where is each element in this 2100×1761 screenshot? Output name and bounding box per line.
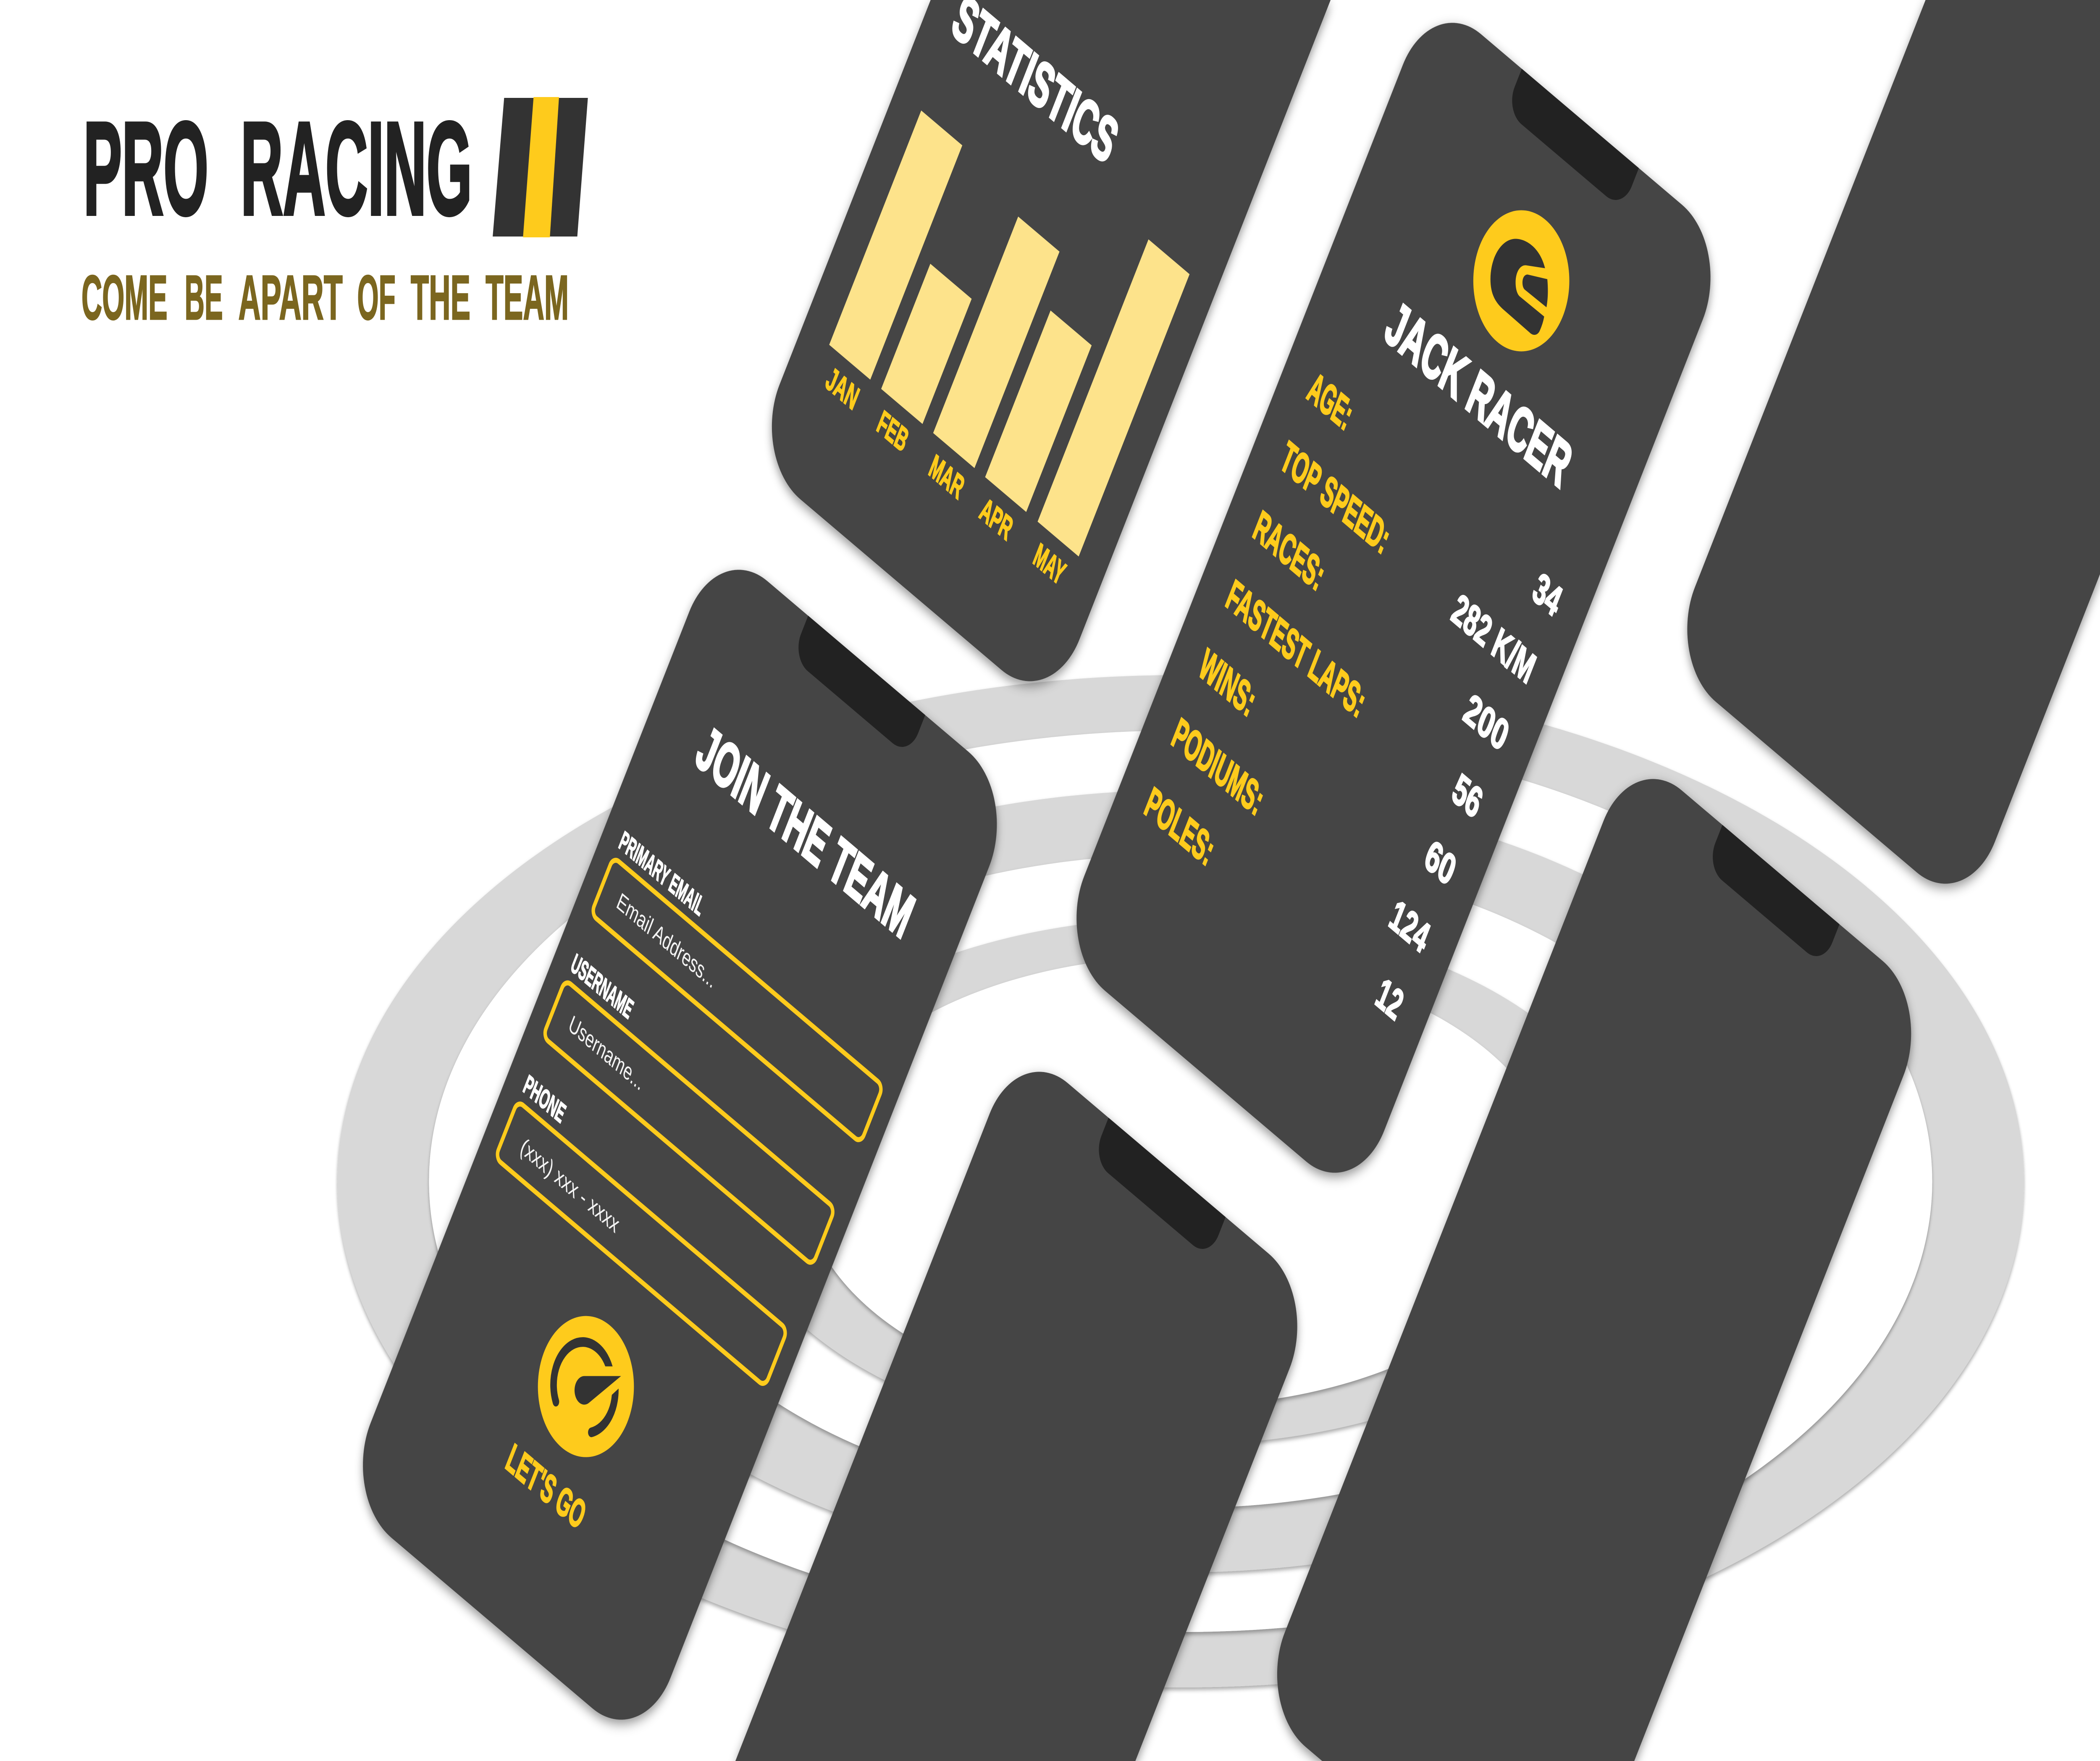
let's go label: LET'S GO xyxy=(501,1435,591,1538)
field: phone xyxy=(495,1069,800,1387)
title: pro racing xyxy=(84,95,472,243)
join heading: JOIN THE TEAM xyxy=(689,712,922,951)
phone: jack racer profile xyxy=(1055,0,1731,1204)
field: primary email: Email Address... xyxy=(614,888,720,994)
tagline: COME xyxy=(81,263,168,333)
tagline xyxy=(81,263,569,333)
month labels: MAR xyxy=(925,448,969,506)
field: username: USERNAME xyxy=(567,948,637,1025)
field: primary email: PRIMARY EMAIL xyxy=(616,825,708,922)
field: username: Username... xyxy=(565,1010,648,1096)
notch xyxy=(792,616,925,757)
phone: blank bottom right xyxy=(1277,779,1911,1761)
notch xyxy=(1505,69,1639,210)
stat values: 282 K/M xyxy=(1446,585,1541,694)
driver name: JACK RACER xyxy=(1378,287,1580,500)
stat labels: PODIUMS: xyxy=(1166,709,1270,825)
field: username xyxy=(543,948,848,1266)
stat values: 200 xyxy=(1458,685,1515,761)
tagline: THE xyxy=(411,263,470,333)
month labels: JAN xyxy=(822,360,864,417)
tagline: TEAM xyxy=(486,263,569,333)
field: phone: (xxx) xxx - xxxx xyxy=(517,1133,623,1238)
race track rings xyxy=(337,675,2024,1687)
stat values: 34 xyxy=(1527,564,1567,626)
field: phone: PHONE xyxy=(520,1069,569,1129)
stat labels: RACES: xyxy=(1248,502,1331,600)
phone: blank bottom middle xyxy=(735,1072,1297,1761)
icon: helmet xyxy=(1473,210,1569,351)
notch xyxy=(1092,1118,1226,1259)
month labels xyxy=(822,360,1070,592)
stat labels: AGE: xyxy=(1302,363,1359,440)
bar chart xyxy=(829,63,1189,557)
stat values: 56 xyxy=(1446,765,1488,828)
tagline: OF xyxy=(357,263,396,333)
notch xyxy=(1706,825,1840,966)
tagline: APART xyxy=(239,263,343,333)
statistics content xyxy=(811,0,1221,597)
logo: road stripes xyxy=(493,97,588,237)
phone: statistics xyxy=(772,0,1331,681)
phone: blank top right xyxy=(1687,0,2100,884)
field: primary email xyxy=(591,825,896,1143)
tagline: BE xyxy=(185,263,223,333)
stat labels: WINS: xyxy=(1194,640,1262,726)
stat values xyxy=(1314,518,1567,1030)
stat values: 60 xyxy=(1419,831,1462,895)
month labels: MAY xyxy=(1029,536,1070,592)
stat labels: POLES: xyxy=(1139,778,1221,875)
phone: join the team xyxy=(342,539,1018,1750)
stat values: 124 xyxy=(1384,891,1435,963)
stat labels: FASTEST LAPS: xyxy=(1221,571,1372,727)
title: pro racing: RACING xyxy=(241,95,472,243)
icon: speedometer xyxy=(538,1316,634,1457)
title: pro racing: PRO xyxy=(84,95,208,243)
month labels: FEB xyxy=(873,404,913,459)
month labels: APR xyxy=(976,491,1017,547)
stat labels: TOP SPEED: xyxy=(1275,433,1396,563)
stat labels xyxy=(1139,363,1453,935)
stat values: 12 xyxy=(1370,969,1409,1030)
